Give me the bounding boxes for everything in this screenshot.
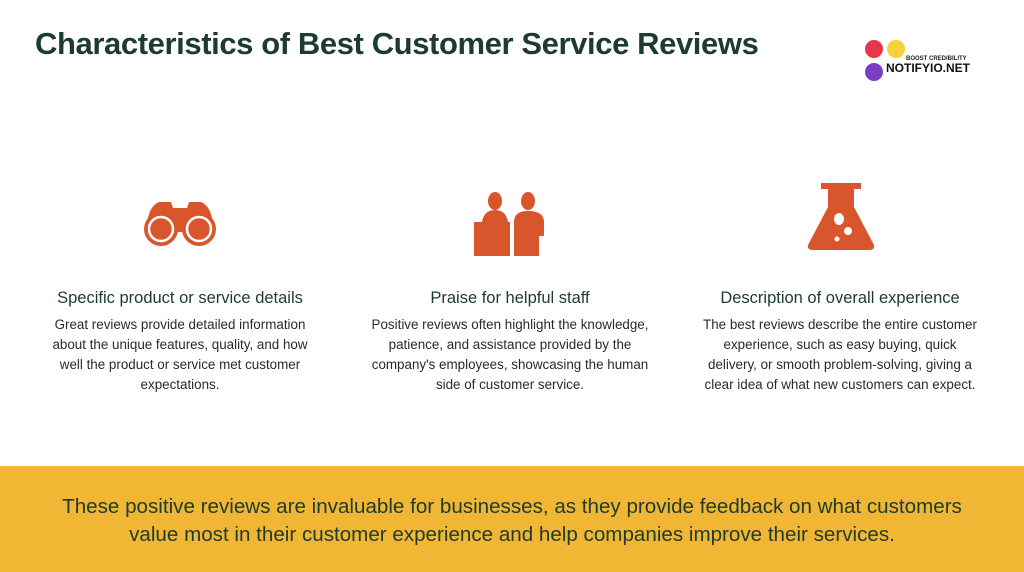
column: overall experience: The best reviews describe the entire customer experience, such as easy buying, quick delivery, or smooth problem-solving, giving a clear idea of what new customers can expect. <box>703 317 977 392</box>
footer band: value most in their customer experience and help companies improve their services. <box>129 523 895 546</box>
footer band: These positive reviews are invaluable for businesses, as they provide feedback on what customers <box>62 495 962 518</box>
logo: BOOST CREDIBILITY <box>906 56 967 62</box>
column: helpful staff: Positive reviews often highlight the knowledge, patience, and assistance provided by the company's employees, showcasing the human side of customer service. <box>372 317 648 392</box>
logo <box>865 40 971 81</box>
icon: binoculars <box>144 202 216 246</box>
column: helpful staff: Praise for helpful staff <box>430 289 590 307</box>
icon: people <box>474 192 544 256</box>
title: Characteristics of Best Customer Service Reviews <box>35 26 758 61</box>
icon: flask <box>808 183 874 250</box>
column: product details: Specific product or service details <box>57 289 303 307</box>
logo: NOTIFYIO.NET <box>886 61 971 75</box>
column: product details: Great reviews provide detailed information about the unique features, quality, and how well the product or service met customer expectations. <box>52 317 308 392</box>
footer band <box>0 466 1024 572</box>
column: overall experience: Description of overall experience <box>720 289 960 307</box>
